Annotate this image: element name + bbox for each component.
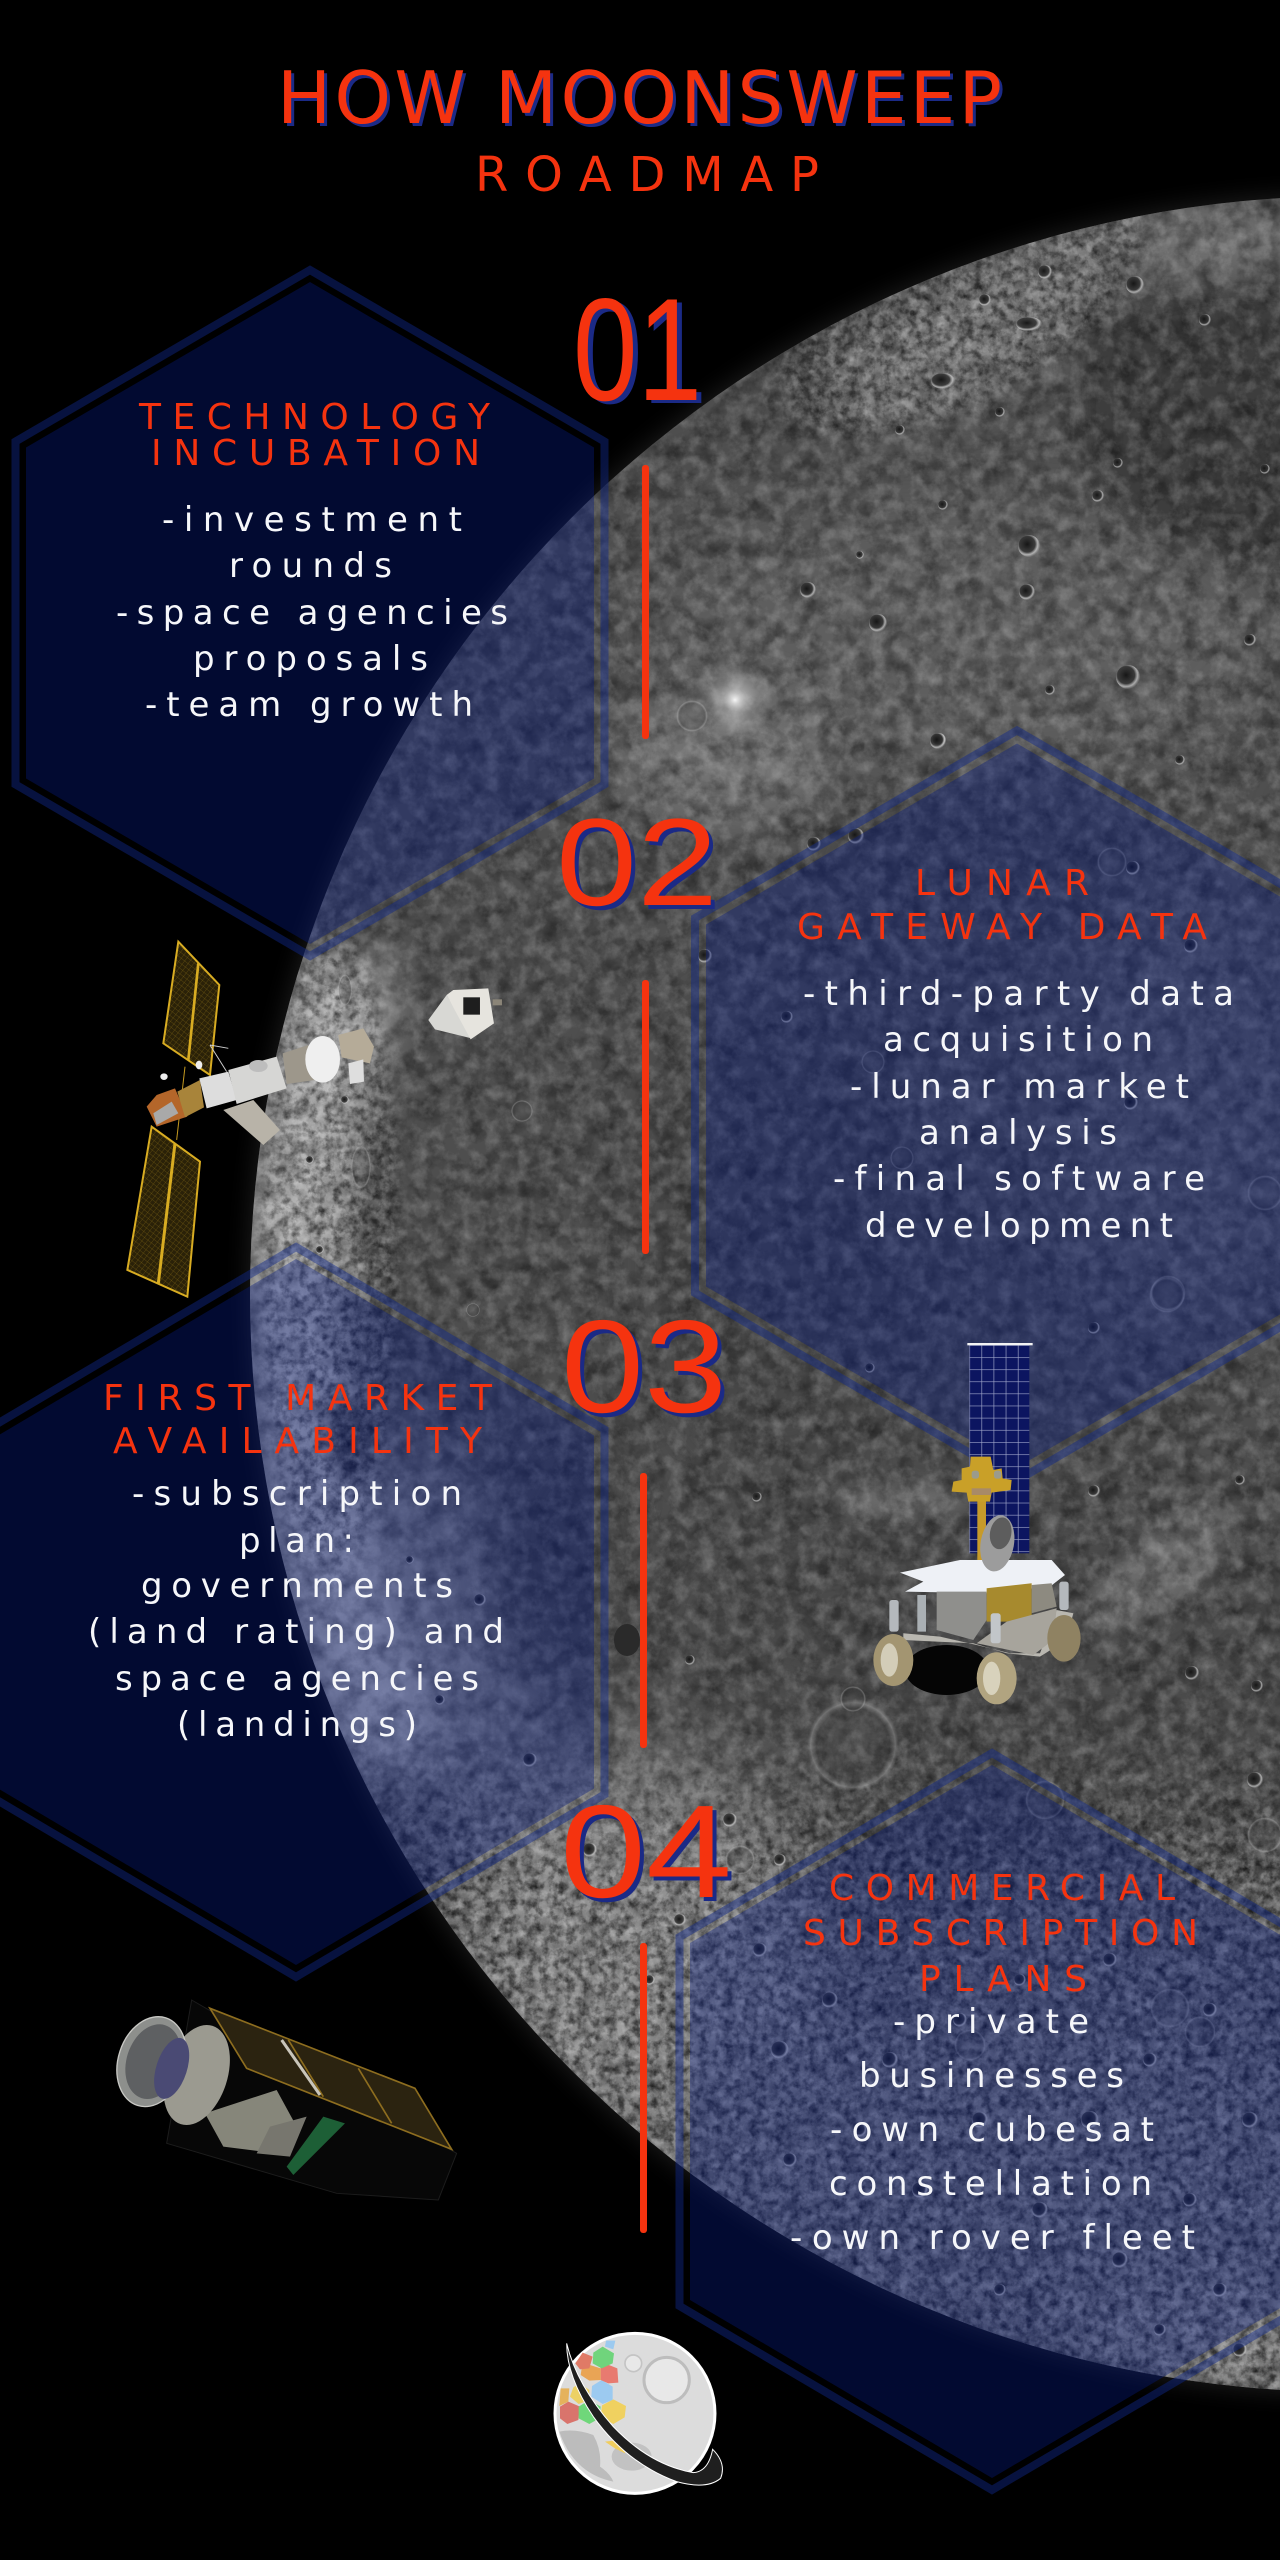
title: HOW MOONSWEEP [277,56,1002,140]
body text: businesses [859,2056,1124,2096]
heading: PLANS [919,1959,1087,2000]
moonsweep logo [555,2333,722,2493]
timeline line 1 [642,465,649,739]
moon [240,190,1280,2400]
body text: (landings) [177,1705,417,1745]
body text [116,500,508,725]
step number 02: 02 [560,798,722,936]
step number 03: 03 [565,1297,731,1444]
body text: acquisition [883,1020,1153,1060]
heading: SUBSCRIPTION [803,1913,1198,1954]
body text: -own rover fleet [790,2218,1195,2258]
illustration: orion capsule [428,988,502,1039]
heading: COMMERCIAL [829,1868,1175,1909]
heading [138,397,491,474]
body text: proposals [193,639,428,679]
heading: TECHNOLOGY [138,397,491,438]
illustration: lunar gateway station [127,942,502,1297]
timeline line 4 [640,1943,647,2233]
body text: -investment [162,500,462,540]
heading [803,1868,1198,2000]
body text: development [865,1206,1173,1246]
subtitle: ROADMAP [475,147,819,203]
step number 04: 04 [564,1782,736,1929]
body text: constellation [829,2164,1152,2204]
panel: lunar gateway data [695,730,1280,1480]
hexagon frame [0,1247,604,1977]
body text: -third-party data [803,974,1234,1014]
body text: plan: [239,1521,354,1561]
body text: governments [141,1566,453,1606]
hexagon frame [16,270,604,956]
body text [790,2002,1195,2258]
heading: GATEWAY DATA [797,907,1207,948]
heading: LUNAR [915,863,1089,904]
timeline line 3 [640,1473,647,1748]
step number 04: 04 [560,1778,732,1925]
hexagon frame [680,1753,1280,2490]
body text [803,974,1234,1246]
hexagon frame [695,730,1280,1480]
body text [88,1474,504,1745]
heading: FIRST MARKET [103,1378,493,1419]
step number 02: 02 [556,794,718,932]
body text: analysis [919,1113,1117,1153]
heading [797,863,1207,948]
panel: first market availability [0,1247,604,1977]
body text: (land rating) and [88,1612,504,1652]
step number 01: 01 [573,268,702,431]
timeline line 2 [642,980,649,1254]
heading: INCUBATION [151,433,480,474]
panel: commercial subscription plans [680,1753,1280,2490]
body text: -final software [833,1159,1205,1199]
step number 01: 01 [578,271,707,434]
body text: -subscription [132,1474,462,1514]
body text: -team growth [145,685,473,725]
body text: -space agencies [116,593,508,633]
panel: technology incubation [16,270,604,956]
body text: rounds [229,546,392,586]
illustration: lunar rover [873,1343,1081,1704]
illustration: cubesat [106,2000,457,2200]
body text: -lunar market [850,1067,1189,1107]
heading [103,1378,493,1462]
heading: AVAILABILITY [113,1421,483,1462]
step number 03: 03 [561,1293,727,1440]
body text: -private [893,2002,1089,2042]
body text: space agencies [115,1659,479,1699]
body text: -own cubesat [830,2110,1154,2150]
title: HOW MOONSWEEP [280,59,1005,143]
